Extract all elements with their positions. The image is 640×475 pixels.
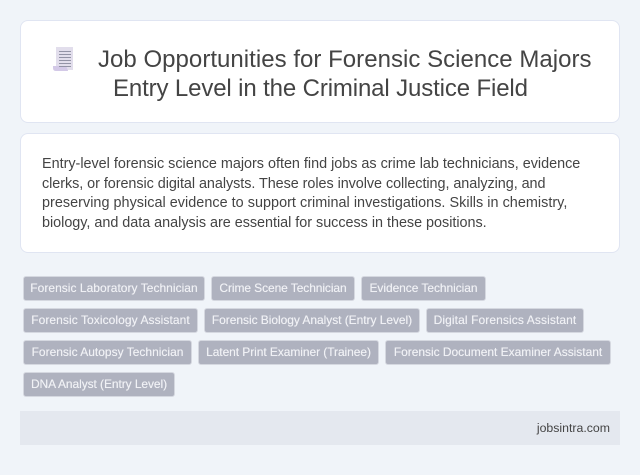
tag (23, 308, 198, 333)
tag: DNA Analyst (Entry Level) (31, 377, 167, 391)
footer text: jobsintra.com (537, 421, 610, 435)
text block: clerks, or forensic digital analysts. These roles involve collecting, analyzing, and (42, 176, 545, 192)
panel: description (20, 133, 620, 253)
tag (385, 340, 611, 365)
tag (211, 276, 355, 301)
tag: Forensic Laboratory Technician (30, 281, 198, 295)
tag: Crime Scene Technician (219, 281, 347, 295)
tag (426, 308, 584, 333)
tag: Forensic Toxicology Assistant (31, 313, 190, 327)
text block: preserving physical evidence to support criminal investigations. Skills in chemistry, (42, 195, 567, 211)
tag: Forensic Autopsy Technician (32, 345, 183, 359)
panel: job tags (23, 276, 611, 397)
tag (23, 340, 192, 365)
title (98, 46, 592, 102)
tag: Digital Forensics Assistant (434, 313, 576, 327)
text block: biology, and data analysis are essential for success in these positions. (42, 214, 487, 230)
tag: Evidence Technician (369, 281, 478, 295)
text block: Entry-level forensic science majors often find jobs as crime lab technicians, evidence (42, 156, 580, 172)
tag: Latent Print Examiner (Trainee) (206, 345, 371, 359)
panel: header (20, 20, 620, 123)
footer bar (20, 411, 620, 445)
tag (23, 372, 175, 397)
tag (23, 276, 205, 301)
text block (42, 156, 580, 230)
tag: Forensic Document Examiner Assistant (394, 345, 602, 359)
title: Entry Level in the Criminal Justice Field (113, 75, 528, 102)
tag (204, 308, 420, 333)
tag: Forensic Biology Analyst (Entry Level) (212, 313, 412, 327)
title: Job Opportunities for Forensic Science Majors (98, 46, 592, 73)
tag (361, 276, 486, 301)
icon: document scroll (53, 47, 73, 71)
tag (198, 340, 379, 365)
